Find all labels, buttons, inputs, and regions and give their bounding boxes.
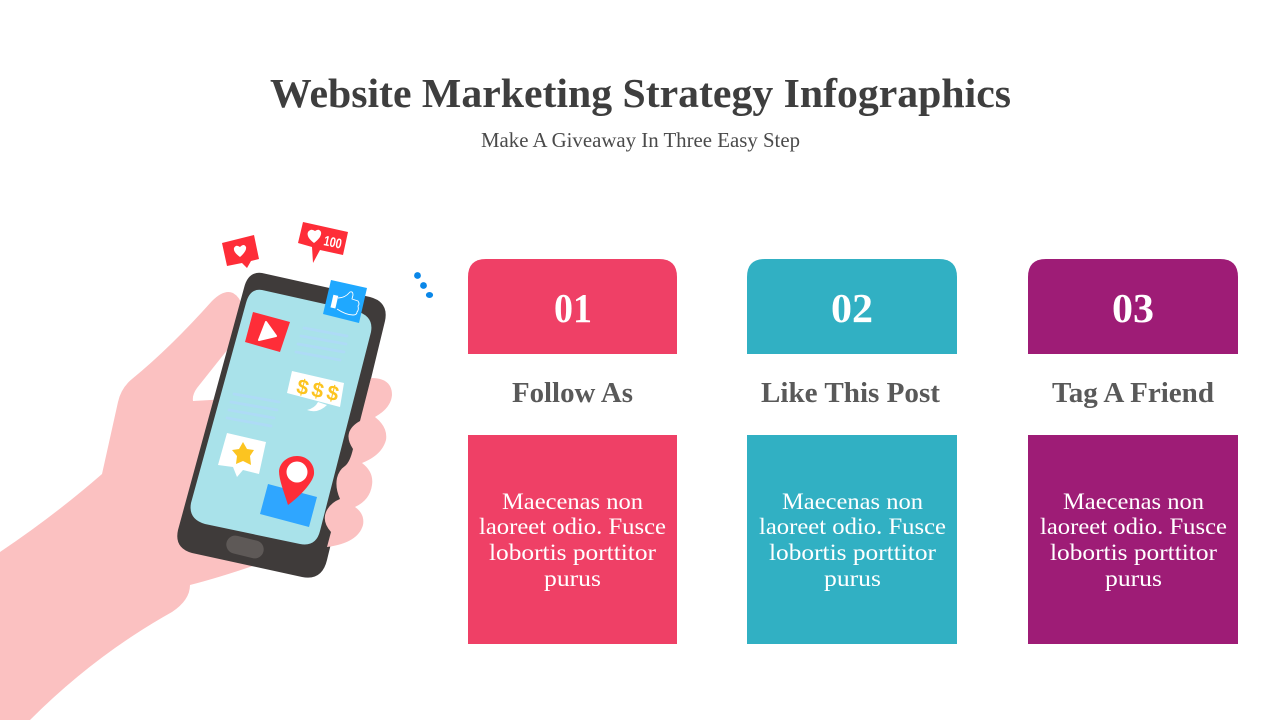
body text 3: purus bbox=[1105, 566, 1162, 591]
subtitle: Make A Giveaway In Three Easy Step bbox=[481, 128, 800, 152]
money speech bubble bbox=[287, 371, 344, 411]
body text 1: lobortis porttitor bbox=[489, 540, 656, 565]
hand and arm bbox=[0, 292, 270, 720]
icon: video play bbox=[245, 312, 290, 352]
heading: Follow As: Follow As bbox=[512, 378, 633, 409]
star speech bubble bbox=[218, 433, 266, 477]
body text 2 bbox=[759, 489, 946, 591]
fingers bbox=[325, 378, 392, 547]
body text 2: purus bbox=[824, 566, 881, 591]
location card bbox=[260, 484, 317, 527]
text lines lower bbox=[227, 394, 279, 426]
home button bbox=[224, 534, 266, 560]
panel: step 1 bbox=[468, 259, 677, 644]
phone screen bbox=[191, 290, 371, 544]
text card 3 bbox=[1028, 435, 1238, 644]
icon: thumbs up bbox=[323, 280, 367, 323]
panel: step 3 bbox=[1028, 259, 1238, 644]
illustration: hand holding phone bbox=[0, 222, 433, 720]
heart speech bubble bbox=[222, 235, 259, 268]
number 03: 03 bbox=[1112, 285, 1154, 331]
body text 1: laoreet odio. Fusce bbox=[479, 514, 666, 539]
money speech bubble: $ bbox=[309, 378, 326, 403]
body text 1: Maecenas non bbox=[502, 489, 644, 514]
body text 1: purus bbox=[544, 566, 601, 591]
number 01: 01 bbox=[554, 285, 592, 331]
location pin bbox=[279, 456, 314, 505]
number 02: 02 bbox=[831, 285, 873, 331]
body text 1 bbox=[479, 489, 666, 591]
body text 3: Maecenas non bbox=[1063, 489, 1205, 514]
body text 2: Maecenas non bbox=[782, 489, 924, 514]
body text 3: laoreet odio. Fusce bbox=[1040, 514, 1227, 539]
blue dots bbox=[414, 272, 433, 298]
number tab 01 bbox=[468, 259, 677, 354]
likes speech bubble bbox=[298, 222, 348, 263]
body text 3: lobortis porttitor bbox=[1050, 540, 1217, 565]
body text 2: laoreet odio. Fusce bbox=[759, 514, 946, 539]
gap between thumb and palm bbox=[193, 349, 240, 401]
phone body bbox=[177, 273, 386, 578]
money speech bubble: $ bbox=[324, 381, 341, 406]
likes speech bubble: 100 bbox=[322, 232, 343, 252]
heading: Like This Post: Like This Post bbox=[761, 378, 941, 409]
money speech bubble: $ bbox=[294, 375, 311, 400]
number tab 02 bbox=[747, 259, 957, 354]
text lines upper bbox=[296, 328, 347, 360]
text card 1 bbox=[468, 435, 677, 644]
heading: Tag A Friend: Tag A Friend bbox=[1052, 378, 1214, 409]
body text 2: lobortis porttitor bbox=[769, 540, 936, 565]
number tab 03 bbox=[1028, 259, 1238, 354]
title: Website Marketing Strategy Infographics bbox=[270, 70, 1011, 116]
panel: step 2 bbox=[747, 259, 957, 644]
body text 3 bbox=[1040, 489, 1227, 591]
text card 2 bbox=[747, 435, 957, 644]
